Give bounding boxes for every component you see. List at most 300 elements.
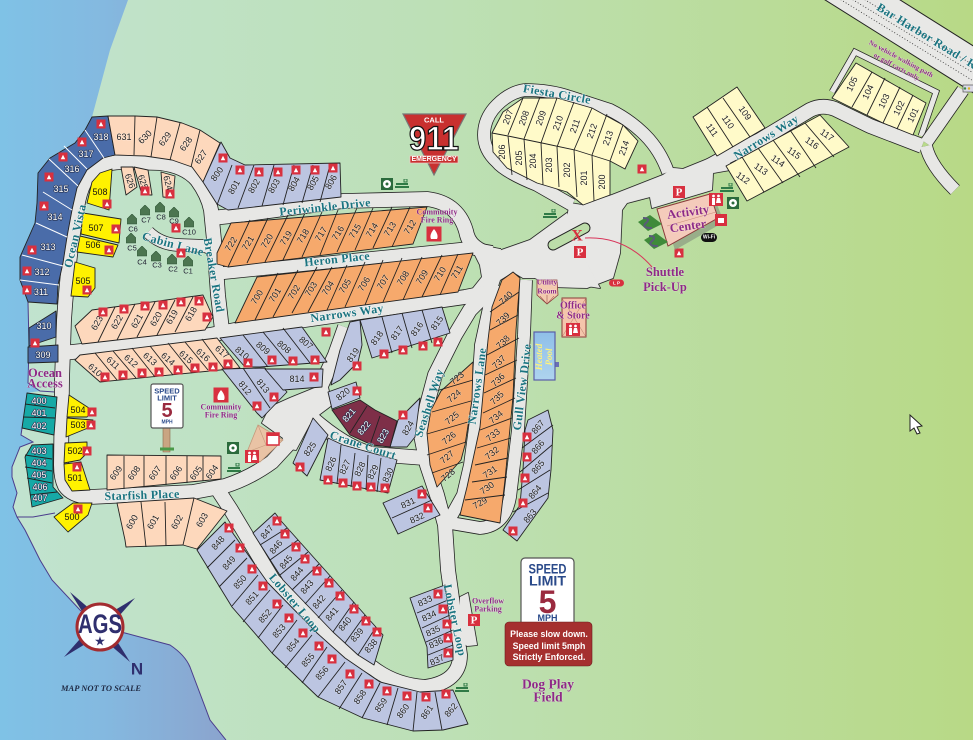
lots 700 series: 740 <box>497 289 515 307</box>
lots 400 series: 406 <box>32 482 48 492</box>
cabins C1-C10 <box>126 202 196 276</box>
cabins C1-C10: C8 <box>156 212 166 222</box>
lots 600 series: 607 <box>147 464 163 482</box>
community fire ring, lower <box>201 388 241 420</box>
lots 200 series Fiesta Circle: 200 <box>597 174 607 190</box>
parking and shuttle pick-up marker: X <box>571 228 583 244</box>
lots 100 series: 110 <box>720 113 736 131</box>
lots 300 series: 315 <box>53 184 69 194</box>
lots 821-823 maroon: 822 <box>355 419 373 437</box>
lots 800 series: 854 <box>284 636 302 654</box>
lots 821-823 maroon <box>332 400 397 447</box>
lots 700 series: 739 <box>494 310 512 328</box>
ocean access label <box>27 366 63 390</box>
lots 800 series: 829 <box>365 463 381 481</box>
lots 600 series: 631 <box>116 132 132 142</box>
lots 300 series: 314 <box>47 212 63 222</box>
lots 400 series <box>22 393 63 507</box>
lots 700 series <box>217 207 520 523</box>
lots 400 series: 401 <box>31 408 47 418</box>
cabins C1-C10: C4 <box>137 258 147 266</box>
overflow parking: Overflow <box>472 596 504 606</box>
road labels: Seashell Way <box>411 367 447 439</box>
lots 700 series: 734 <box>487 408 505 426</box>
lots 100 series <box>693 63 926 201</box>
lots 700 series: 700 <box>249 288 265 306</box>
lots 600 series: 616 <box>194 346 212 364</box>
parking and shuttle pick-up marker: P <box>577 246 584 258</box>
lots 800 series: 808 <box>275 338 293 356</box>
call 911 sign <box>403 114 466 175</box>
road labels: Crane Court <box>328 428 398 462</box>
lots 600 series: 600 <box>124 513 140 531</box>
lots 300 series: 309 <box>35 350 51 360</box>
lots 600 series: 614 <box>159 350 177 368</box>
AGS compass logo <box>64 592 143 678</box>
ocean access label: Ocean <box>28 366 62 380</box>
small speed limit sign: MPH <box>161 420 173 426</box>
lots 600 series: 615 <box>177 348 195 366</box>
lots 100 series: 113 <box>752 161 770 177</box>
community fire ring, upper <box>417 208 457 242</box>
lots 800 series: 828 <box>352 460 368 478</box>
coastline <box>12 302 226 740</box>
lots 800 series: 835 <box>424 623 442 639</box>
cursor <box>910 415 922 434</box>
road labels: Periwinkle Drive <box>279 195 372 219</box>
lots 800 series: 849 <box>220 554 238 572</box>
lots 800 series: 815 <box>429 314 445 332</box>
lots 700 series: 737 <box>490 353 508 371</box>
lots 600 series: 619 <box>164 308 180 326</box>
lots 600 series: 608 <box>126 464 142 482</box>
utility room: Utility <box>537 278 557 286</box>
lots 600 series: 603 <box>194 511 210 529</box>
lots 100 series: 109 <box>737 104 753 122</box>
lots 700 series: 720 <box>259 232 275 250</box>
lots 600 series: 626 <box>123 172 137 190</box>
lots 200 series Fiesta Circle: 206 <box>497 144 507 160</box>
lots 600 series: 618 <box>183 305 199 323</box>
lots 100 series: 102 <box>891 99 907 117</box>
lots 800 series: 826 <box>323 455 339 473</box>
lots 600 series: 630 <box>136 128 154 146</box>
activity center: Center <box>669 216 708 235</box>
community fire ring, lower: Fire Ring <box>205 410 237 420</box>
lots 600 series: 611 <box>104 354 122 372</box>
lots 800 series: 816 <box>409 320 425 338</box>
lots 800 series: 819 <box>345 346 361 364</box>
lots 700 series: 709 <box>414 268 430 286</box>
shuttle pick-up label <box>643 265 687 294</box>
community fire ring, lower: Community <box>201 402 241 412</box>
lots 500 series <box>54 169 121 532</box>
no vehicle note: or golf carts only. <box>872 51 922 83</box>
cabins C1-C10: C7 <box>141 216 151 224</box>
lots 800 series: 846 <box>267 538 285 556</box>
lots 700 series: 738 <box>494 333 512 351</box>
lots 800 series: 832 <box>408 510 426 526</box>
small speed limit sign: 5 <box>161 400 173 422</box>
lots 800 series: 801 <box>226 178 242 196</box>
lots 500 series: 507 <box>88 223 104 233</box>
road labels: Heron Place <box>303 249 371 269</box>
cabins C1-C10: C1 <box>183 266 193 276</box>
lots 800 series: 860 <box>395 702 411 720</box>
walking path <box>832 52 936 136</box>
lots 800 series: 806 <box>323 173 339 191</box>
lots 400 series: 405 <box>31 470 47 480</box>
lots 800 series: 814 <box>289 374 305 384</box>
lots 100 series: 104 <box>860 83 876 101</box>
lots 821-823 maroon: 823 <box>375 427 391 445</box>
lots 700 series: 731 <box>481 464 499 480</box>
roads <box>61 90 963 687</box>
utility room <box>537 278 558 304</box>
lots 800 series: 825 <box>302 440 318 458</box>
lots 600 series: 602 <box>169 513 185 531</box>
lots 600 series: 609 <box>108 464 124 482</box>
lots 200 series Fiesta Circle: 204 <box>528 153 538 169</box>
lots 200 series Fiesta Circle: 213 <box>601 129 615 147</box>
lots 700 series: 715 <box>347 222 363 240</box>
lots 600 series <box>75 116 240 549</box>
call 911 sign: EMERGENCY <box>411 156 457 163</box>
speed warning box: Speed limit 5mph <box>513 641 585 651</box>
lots 700 series: 707 <box>375 273 391 291</box>
lots 600 series: 617 <box>213 343 231 361</box>
lots 200 series Fiesta Circle <box>492 97 638 205</box>
lots 800 series: 817 <box>389 324 405 342</box>
small service icons <box>227 178 739 692</box>
lots 800 series: 858 <box>352 688 368 706</box>
lots 200 series Fiesta Circle: 211 <box>568 118 582 134</box>
speed warning box: Please slow down. <box>510 629 588 639</box>
lots 700 series: 714 <box>364 221 380 239</box>
lots 800 series: 805 <box>305 174 321 192</box>
lots 800 series: 818 <box>369 329 385 347</box>
road labels: Gull View Drive <box>510 343 534 431</box>
lots 500 series: 502 <box>67 446 83 456</box>
lots 200 series Fiesta Circle: 208 <box>517 109 531 127</box>
lots 400 series: 402 <box>31 421 47 431</box>
road labels: Cabin Lane <box>141 229 206 259</box>
lots 800 series: 827 <box>337 458 353 476</box>
lots 700 series: 725 <box>443 409 461 427</box>
lots 300 series: 310 <box>36 321 52 331</box>
traffic signal <box>963 85 973 92</box>
lots 800 series: 866 <box>529 438 547 456</box>
lots 800 series: 861 <box>419 703 435 721</box>
cabins C1-C10: C6 <box>128 224 138 234</box>
lots 700 series: 732 <box>483 444 501 462</box>
lots 700 series: 719 <box>278 229 294 247</box>
call 911 sign: CALL <box>424 116 444 124</box>
lots 200 series Fiesta Circle: 201 <box>579 170 589 186</box>
lots 400 series: 407 <box>32 493 48 503</box>
lots 700 series: 736 <box>489 371 507 389</box>
large speed limit sign: 5 <box>539 584 556 620</box>
lots 821-823 maroon: 821 <box>340 406 358 424</box>
lots 800 series: 804 <box>286 175 302 193</box>
lots 600 series: 623 <box>89 314 105 332</box>
lots 200 series Fiesta Circle: 207 <box>501 108 515 126</box>
road labels: Narrows Way <box>731 111 801 163</box>
large speed limit sign: SPEED <box>528 562 567 576</box>
lots 800 series: 813 <box>254 377 272 395</box>
lots 600 series: 621 <box>129 312 145 330</box>
lots 800 series: 809 <box>254 339 272 357</box>
lots 800 series <box>197 142 553 731</box>
cabins C1-C10: C9 <box>169 216 179 226</box>
large speed limit sign: MPH <box>538 613 558 623</box>
ocean access label: Access <box>27 376 63 390</box>
heated pool <box>534 332 559 380</box>
lots 800 series: 852 <box>256 607 274 625</box>
lots 700 series: 713 <box>382 220 398 238</box>
lots 700 series: 724 <box>445 387 463 405</box>
lots 800 series: 851 <box>243 589 261 607</box>
lots 600 series: 625 <box>136 173 150 191</box>
pavilion with restroom <box>245 425 283 463</box>
lots 800 series: 820 <box>334 385 352 403</box>
lots 500 series: 505 <box>75 276 91 286</box>
utility room: Room <box>537 286 557 296</box>
lots 100 series: 117 <box>818 127 836 143</box>
lots 800 series: 865 <box>529 458 547 476</box>
lots 600 series: 624 <box>161 174 175 192</box>
AGS compass logo: N <box>131 660 143 678</box>
community fire ring, upper: Fire Ring <box>421 216 453 224</box>
lots 800 series: 831 <box>399 495 417 511</box>
lots 100 series: 101 <box>905 106 921 124</box>
overflow parking <box>468 596 504 626</box>
lots 600 series: 605 <box>188 464 204 482</box>
lots 100 series: 114 <box>769 153 787 169</box>
lots 300 series: 311 <box>34 287 48 297</box>
lots 200 series Fiesta Circle: 203 <box>544 157 554 173</box>
heated pool: Pool <box>544 348 554 366</box>
road labels: Narrows Lane <box>465 347 489 425</box>
lots 600 series: 620 <box>148 310 164 328</box>
lots 800 series: 848 <box>209 534 227 552</box>
lots 200 series Fiesta Circle: 210 <box>551 114 565 132</box>
lots 200 series Fiesta Circle: 202 <box>562 162 572 178</box>
road: Bar Harbor Road <box>822 0 973 94</box>
lots 700 series: 710 <box>432 265 448 283</box>
heated pool: Heated <box>534 343 544 371</box>
lots 700 series: 717 <box>313 225 329 243</box>
lots 800 series: 810 <box>233 344 251 362</box>
parking and shuttle pick-up marker <box>571 186 685 267</box>
speed warning box: Strictly Enforced. <box>513 652 585 662</box>
lots 800 series: 839 <box>348 626 366 644</box>
lots 400 series: 400 <box>31 396 47 406</box>
activity center <box>657 193 727 250</box>
lots 700 series: 702 <box>286 283 302 301</box>
lots 600 series: 628 <box>178 135 194 153</box>
shuttle pick-up label: Shuttle <box>646 265 685 279</box>
lots 300 series: 316 <box>64 164 80 174</box>
road labels: Breaker Road <box>201 237 227 313</box>
office and store: Office <box>560 300 587 312</box>
lots 500 series: 503 <box>70 420 86 430</box>
lots 800 series: 845 <box>277 553 295 571</box>
lots 600 series: 610 <box>86 361 104 379</box>
lots 800 series: 847 <box>258 523 276 541</box>
dog play field label: Field <box>533 690 563 704</box>
shuttle pick-up label: Pick-Up <box>643 280 687 294</box>
lots 200 series Fiesta Circle: 212 <box>585 122 599 140</box>
lots 700 series: 729 <box>471 495 489 511</box>
lots 700 series: 705 <box>337 277 353 295</box>
overflow parking: P <box>471 614 478 626</box>
lots 800 series: 833 <box>416 593 434 609</box>
lots 700 series: 728 <box>439 466 457 484</box>
lots 200 series Fiesta Circle: 209 <box>534 109 548 127</box>
lots 600 series: 612 <box>122 352 140 370</box>
lots 600 series: 629 <box>157 130 173 148</box>
lots 200 series Fiesta Circle: 214 <box>617 139 631 157</box>
lots 400 series: 403 <box>31 446 47 456</box>
lots 700 series: 733 <box>484 426 502 444</box>
cabins C1-C10: C3 <box>152 260 162 270</box>
lots 300 series: 318 <box>93 132 109 142</box>
lots 800 series: 857 <box>333 678 349 696</box>
lots 800 series: 850 <box>231 573 249 591</box>
lots 700 series: 712 <box>402 218 418 236</box>
lots 300 series: 313 <box>40 242 56 252</box>
cabins C1-C10: C2 <box>168 264 178 274</box>
no vehicle note: No vehicle walking path <box>867 39 935 79</box>
call 911 sign: 911 <box>409 120 459 158</box>
lots 800 series: 802 <box>246 177 262 195</box>
community fire ring, upper: Community <box>417 208 457 216</box>
lots 600 series: 604 <box>204 463 220 481</box>
lots 700 series: 708 <box>395 269 411 287</box>
lots 300 series <box>20 116 115 363</box>
lots 800 series: 844 <box>288 565 306 583</box>
lots 800 series: 859 <box>373 696 389 714</box>
lots 800 series: 840 <box>336 615 354 633</box>
speed warning box <box>505 622 592 666</box>
lots 700 series: 701 <box>267 286 283 304</box>
lots 600 series: 613 <box>141 350 159 368</box>
lots 300 series: 317 <box>78 149 94 159</box>
lots 100 series: 116 <box>803 135 821 151</box>
map not to scale note: MAP NOT TO SCALE <box>60 683 141 693</box>
lots 100 series: 103 <box>876 92 892 110</box>
lots 100 series: 111 <box>704 122 720 138</box>
dog play field label <box>522 676 574 704</box>
lots 800 series: 864 <box>526 483 544 501</box>
activity center: Activity <box>666 202 711 222</box>
lots 100 series: 112 <box>734 170 752 186</box>
small speed limit sign: SPEED <box>154 386 180 396</box>
lots 500 series: 504 <box>70 405 86 415</box>
lots 100 series: 115 <box>785 145 803 161</box>
dog play field label: Dog Play <box>522 676 574 692</box>
lots 800 series: 841 <box>323 605 341 623</box>
lots 800 series: 842 <box>310 593 328 611</box>
lots 700 series: 727 <box>438 448 456 466</box>
road labels: Starfish Place <box>104 487 180 503</box>
road labels: Ocean Vista <box>61 203 89 269</box>
lots 700 series: 721 <box>240 234 256 252</box>
lots 700 series: 718 <box>295 227 311 245</box>
road labels: Narrows Way <box>309 301 385 325</box>
lots 800 series: 867 <box>529 418 547 436</box>
lots 500 series: 506 <box>85 240 101 250</box>
lots 700 series: 706 <box>356 275 372 293</box>
lots 800 series: 838 <box>362 637 380 655</box>
lots 700 series: 716 <box>330 224 346 242</box>
lots 700 series: 735 <box>488 389 506 407</box>
lots 700 series: 730 <box>478 480 496 496</box>
road labels: Lobster Loop <box>441 583 469 657</box>
overflow parking: Parking <box>474 604 502 614</box>
lots 800 series: 836 <box>427 635 445 651</box>
lots 800 series: 837 <box>428 652 446 668</box>
lots 600 series: 606 <box>168 464 184 482</box>
road labels: Fiesta Circle <box>522 81 592 107</box>
water <box>0 0 226 740</box>
small speed limit sign: LIMIT <box>157 394 177 402</box>
lots 800 series: 856 <box>313 664 331 682</box>
lots 800 series: 855 <box>299 651 317 669</box>
lots 800 series: 843 <box>298 578 316 596</box>
campsite markers <box>22 120 684 702</box>
lots 600 series: 622 <box>109 313 125 331</box>
playground icons <box>638 215 668 249</box>
AGS compass logo: AGS <box>78 609 122 639</box>
lots 800 series: 863 <box>521 507 539 525</box>
office and store <box>556 298 590 337</box>
lots 100 series: 105 <box>844 75 860 93</box>
lots 600 series: 601 <box>145 513 161 531</box>
lots 400 series: 404 <box>31 458 47 468</box>
lots 200 series Fiesta Circle: 205 <box>514 150 524 166</box>
lots 800 series: 800 <box>209 165 225 183</box>
road labels: Lobster Loop <box>266 571 324 635</box>
LP tag: L P <box>613 280 620 286</box>
lots 700 series: 726 <box>440 429 458 447</box>
lots 500 series: 501 <box>67 473 83 483</box>
lots 700 series: 703 <box>303 280 319 298</box>
cabins C1-C10: C5 <box>127 244 137 252</box>
activity center: Wi-Fi <box>703 234 716 240</box>
lots 300 series: 312 <box>34 267 50 277</box>
lots 800 series: 807 <box>297 334 315 352</box>
LP tag <box>609 280 624 286</box>
lots 800 series: 853 <box>270 622 288 640</box>
lots 800 series: 824 <box>400 419 416 437</box>
cabins C1-C10: C10 <box>182 228 196 236</box>
lots 800 series: 834 <box>420 608 438 624</box>
lots 800 series: 830 <box>380 466 396 484</box>
parking and shuttle pick-up marker: P <box>676 186 683 198</box>
lots 500 series: 500 <box>64 512 80 522</box>
large speed limit sign: LIMIT <box>529 574 567 588</box>
lots 800 series: 862 <box>442 701 460 719</box>
lots 700 series: 711 <box>449 263 465 281</box>
lots 600 series: 627 <box>193 148 209 166</box>
lots 700 series: 722 <box>223 235 239 253</box>
lots 800 series: 812 <box>236 379 254 397</box>
lots 700 series: 704 <box>320 279 336 297</box>
small speed limit sign <box>151 384 183 452</box>
office and store: & Store <box>556 310 590 322</box>
